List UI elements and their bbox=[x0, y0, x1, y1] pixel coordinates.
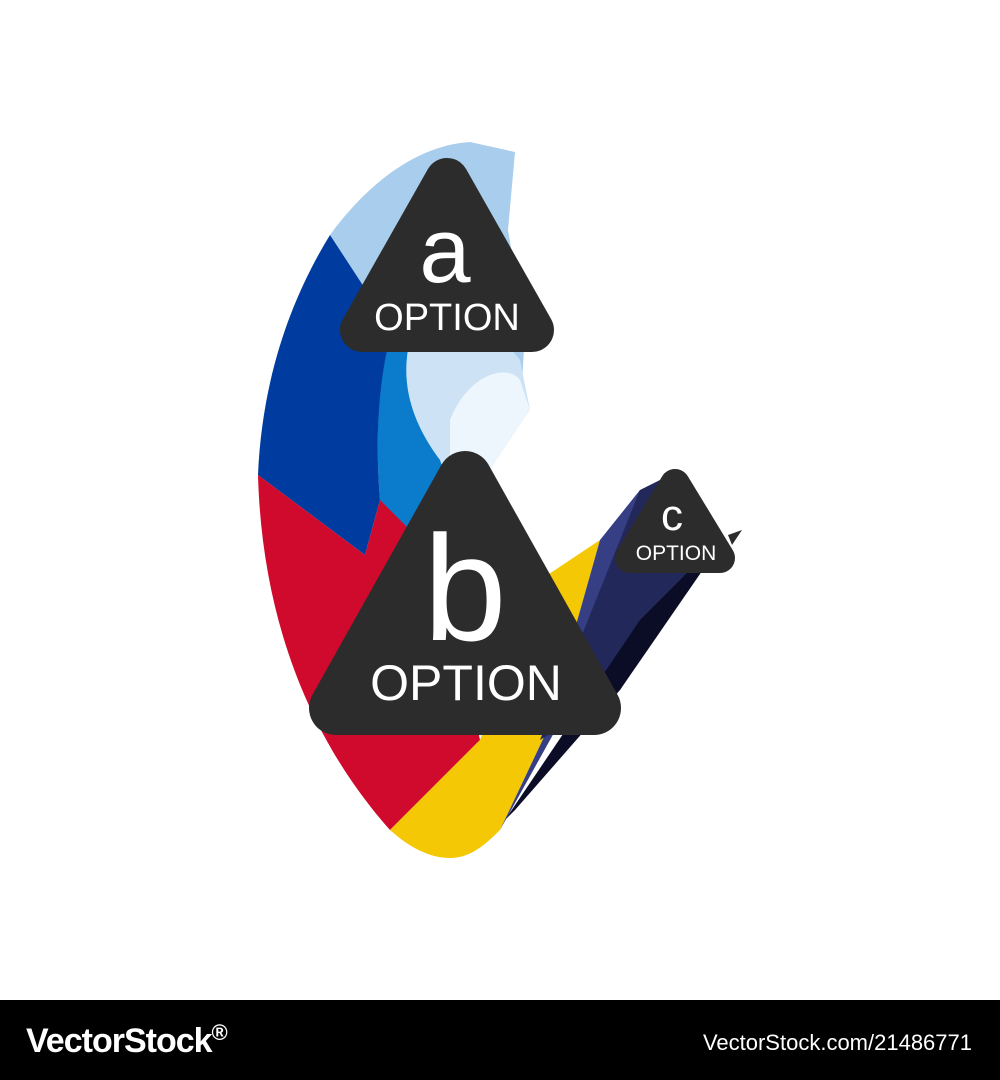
footer bar: ® bbox=[212, 1020, 228, 1045]
abstract shape: multicolour leaf bbox=[258, 142, 720, 858]
option a badge: a bbox=[419, 200, 471, 302]
footer bar bbox=[0, 1000, 1000, 1080]
option a badge: OPTION bbox=[374, 297, 520, 339]
option b badge: b bbox=[423, 504, 507, 672]
footer bar: VectorStock bbox=[26, 1022, 212, 1060]
option c badge: c bbox=[661, 491, 683, 540]
option b badge bbox=[336, 478, 594, 711]
option b badge: OPTION bbox=[370, 655, 562, 711]
option c badge bbox=[630, 484, 742, 565]
option c badge: OPTION bbox=[636, 542, 716, 565]
footer bar: VectorStock.com/21486771 bbox=[703, 1030, 972, 1055]
option a badge bbox=[362, 180, 532, 339]
